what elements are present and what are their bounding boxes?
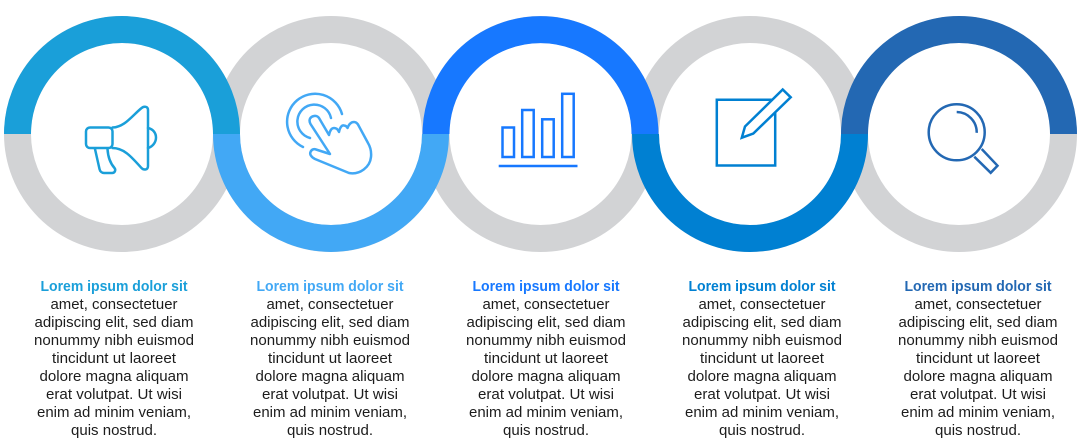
text: step 4: dolore magna aliquam — [688, 368, 836, 385]
text: step 5: dolore magna aliquam — [904, 368, 1052, 385]
text: step 3: tincidunt ut laoreet — [484, 350, 609, 367]
icon: megaphone — [86, 107, 156, 173]
text: step 1: erat volutpat. Ut wisi — [46, 386, 182, 403]
text: step 5: quis nostrud. — [935, 422, 1021, 439]
text: step 5: enim ad minim veniam, — [901, 404, 1055, 421]
text: step 5: adipiscing elit, sed diam — [898, 314, 1058, 331]
text: step 3: erat volutpat. Ut wisi — [478, 386, 614, 403]
text: step 5: amet, consectetuer — [914, 296, 1042, 313]
text: step 2: Lorem ipsum dolor sit — [256, 279, 404, 295]
text: step 1: enim ad minim veniam, — [37, 404, 191, 421]
text: step 2: dolore magna aliquam — [256, 368, 404, 385]
text: step 1: adipiscing elit, sed diam — [34, 314, 194, 331]
text: step 4: adipiscing elit, sed diam — [682, 314, 842, 331]
text: step 1: amet, consectetuer — [50, 296, 178, 313]
text: step 5: tincidunt ut laoreet — [916, 350, 1041, 367]
panel: step 2 — [226, 94, 436, 439]
panel: step 4 — [646, 90, 854, 439]
text: step 2: nonummy nibh euismod — [250, 332, 410, 349]
text: step 4 — [682, 279, 842, 439]
text: step 2 — [250, 279, 410, 439]
ring arc: step 5 top half — [854, 30, 1064, 134]
text: step 4: erat volutpat. Ut wisi — [694, 386, 830, 403]
text: step 1: nonummy nibh euismod — [34, 332, 194, 349]
text: step 3: enim ad minim veniam, — [469, 404, 623, 421]
ring arc: step 3 top half — [436, 30, 645, 134]
text: step 5: erat volutpat. Ut wisi — [910, 386, 1046, 403]
text: step 2: adipiscing elit, sed diam — [250, 314, 410, 331]
text: step 3: dolore magna aliquam — [472, 368, 620, 385]
text: step 4: amet, consectetuer — [698, 296, 826, 313]
text: step 5: nonummy nibh euismod — [898, 332, 1058, 349]
panel: step 1 — [18, 30, 226, 439]
text: step 1: quis nostrud. — [71, 422, 157, 439]
icon: note and pencil — [717, 90, 791, 166]
text: step 3: nonummy nibh euismod — [466, 332, 626, 349]
text: step 2: quis nostrud. — [287, 422, 373, 439]
text: step 2: tincidunt ut laoreet — [268, 350, 393, 367]
text: step 5 — [898, 279, 1058, 439]
text: step 3 — [466, 279, 626, 439]
text: step 1: dolore magna aliquam — [40, 368, 188, 385]
icon: magnifying glass — [929, 104, 998, 173]
text: step 1: tincidunt ut laoreet — [52, 350, 177, 367]
text: step 5: Lorem ipsum dolor sit — [904, 279, 1052, 295]
icon: bar chart — [499, 94, 578, 166]
grey ring tracks — [18, 30, 1064, 238]
text: step 4: Lorem ipsum dolor sit — [688, 279, 836, 295]
text: step 4: tincidunt ut laoreet — [700, 350, 825, 367]
text: step 3: quis nostrud. — [503, 422, 589, 439]
text: step 4: enim ad minim veniam, — [685, 404, 839, 421]
text: step 1 — [34, 279, 194, 439]
text: step 4: nonummy nibh euismod — [682, 332, 842, 349]
text: step 1: Lorem ipsum dolor sit — [40, 279, 188, 295]
text: step 2: erat volutpat. Ut wisi — [262, 386, 398, 403]
text: step 4: quis nostrud. — [719, 422, 805, 439]
panel: step 5 — [854, 30, 1064, 439]
ring arc: step 2 bottom half — [226, 134, 436, 238]
text: step 3: Lorem ipsum dolor sit — [472, 279, 620, 295]
text: step 3: adipiscing elit, sed diam — [466, 314, 626, 331]
text: step 2: enim ad minim veniam, — [253, 404, 407, 421]
icon: pointing hand — [287, 94, 371, 173]
text: step 3: amet, consectetuer — [482, 296, 610, 313]
ring arc: step 1 top half — [18, 30, 226, 134]
panel: step 3 — [436, 30, 645, 439]
ring arc: step 4 bottom half — [646, 134, 854, 238]
text: step 2: amet, consectetuer — [266, 296, 394, 313]
